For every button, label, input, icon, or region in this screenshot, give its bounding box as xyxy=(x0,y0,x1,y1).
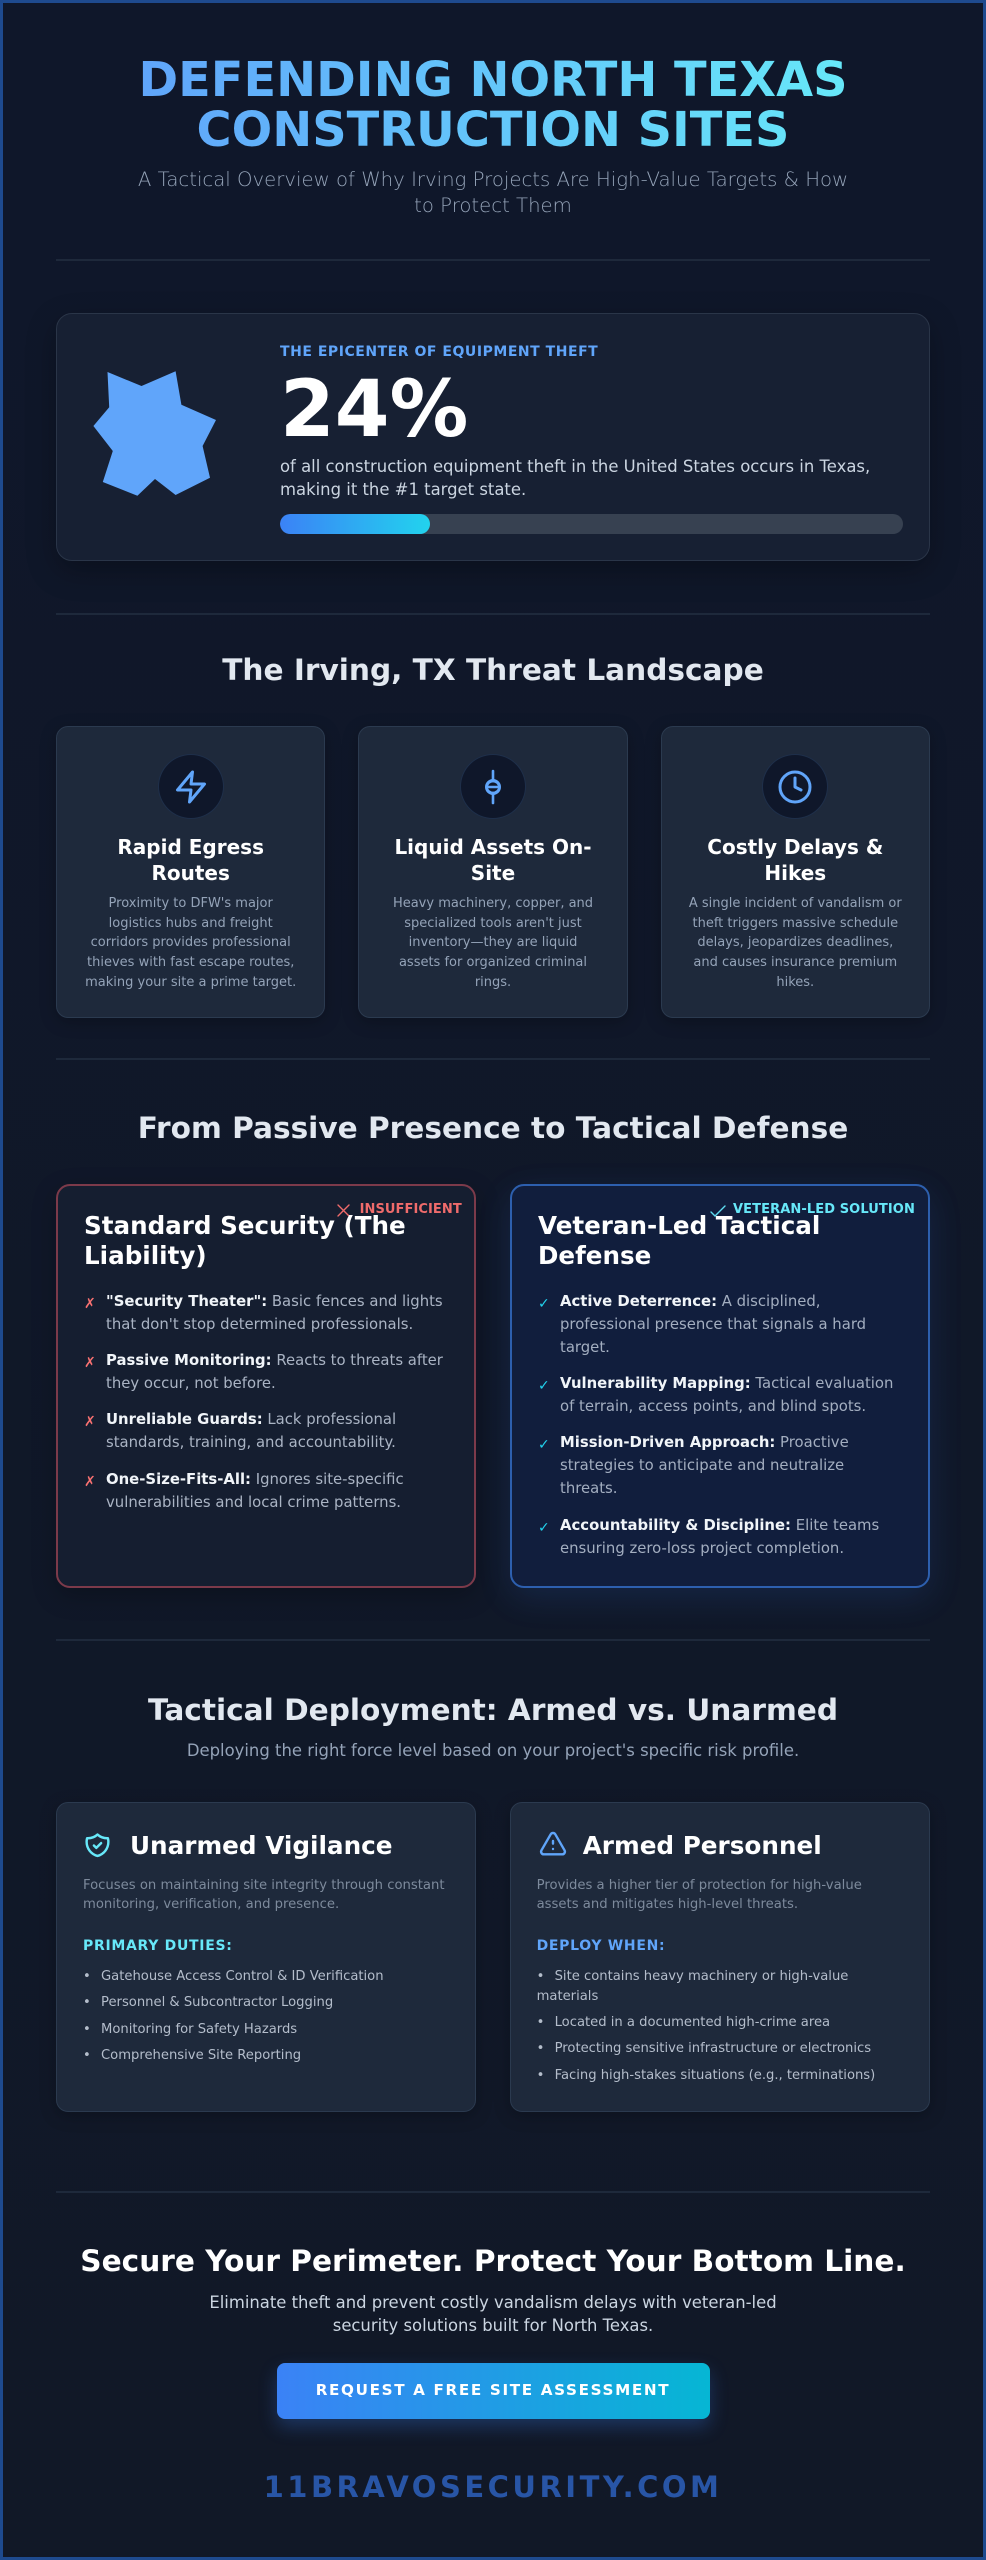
card title xyxy=(707,835,883,885)
panel title: Defense xyxy=(538,1240,651,1270)
duties list: • xyxy=(83,1995,91,2010)
card: costly delays xyxy=(661,726,930,1018)
button: REQUEST A FREE SITE ASSESSMENT xyxy=(316,2381,670,2399)
list item: vulnerabilities and local crime patterns. xyxy=(106,1493,401,1511)
badge: veteran-led solution xyxy=(710,1202,915,1217)
card title: Routes xyxy=(151,861,230,885)
list item: Active Deterrence: A disciplined, xyxy=(560,1292,821,1310)
cross mark: ✗ xyxy=(84,1355,96,1371)
duties list xyxy=(83,1969,384,2063)
heading: threat landscape: The Irving, TX Threat Landscape xyxy=(222,653,764,687)
card title: Rapid Egress xyxy=(117,835,264,859)
duties list: • xyxy=(83,2048,91,2063)
panel: standard security xyxy=(56,1184,476,1588)
card text: rings. xyxy=(475,975,511,990)
duties list: Gatehouse Access Control & ID Verification xyxy=(101,1969,384,1984)
cta text: Eliminate theft and prevent costly vandalism delays with veteran-led xyxy=(209,2293,777,2312)
deploy list: materials xyxy=(537,1989,598,2004)
subtitle: A Tactical Overview of Why Irving Projects Are High-Value Targets & How xyxy=(138,168,848,191)
card text xyxy=(393,896,593,990)
stat number: 24% xyxy=(280,363,468,455)
panel text: Focuses on maintaining site integrity through constant xyxy=(83,1878,445,1893)
list item: standards, training, and accountability. xyxy=(106,1433,396,1451)
duties label: PRIMARY DUTIES: xyxy=(83,1938,233,1954)
card: liquid assets xyxy=(358,726,628,1018)
panel text: monitoring, verification, and presence. xyxy=(83,1897,339,1912)
card title: Site xyxy=(471,861,515,885)
check mark: ✓ xyxy=(538,1378,550,1394)
heading: tactical deployment: Tactical Deployment: Armed vs. Unarmed xyxy=(148,1693,838,1727)
progress fill 24% xyxy=(280,514,430,534)
header xyxy=(138,53,848,217)
list item: strategies to anticipate and neutralize xyxy=(560,1456,844,1474)
list item: Mission-Driven Approach: Proactive xyxy=(560,1433,849,1451)
card title xyxy=(117,835,264,885)
cta text xyxy=(209,2293,777,2335)
list item: One-Size-Fits-All: Ignores site-specific xyxy=(106,1470,404,1488)
card title: Liquid Assets On- xyxy=(394,835,592,859)
cta heading: Secure Your Perimeter. Protect Your Bottom Line. xyxy=(80,2244,906,2278)
panel: veteran-led xyxy=(510,1184,930,1588)
badge text: INSUFFICIENT xyxy=(360,1202,462,1217)
list item xyxy=(538,1516,879,1557)
deploy label: DEPLOY WHEN: xyxy=(537,1938,665,1954)
stat label: THE EPICENTER OF EQUIPMENT THEFT xyxy=(280,344,598,360)
duties list: Comprehensive Site Reporting xyxy=(101,2048,301,2063)
button xyxy=(276,2363,710,2419)
check mark: ✓ xyxy=(538,1437,550,1453)
list item: Accountability & Discipline: Elite teams xyxy=(560,1516,879,1534)
panel: armed personnel xyxy=(510,1802,930,2112)
card text xyxy=(85,896,296,990)
cross mark: ✗ xyxy=(84,1474,96,1490)
list item xyxy=(538,1374,893,1415)
list item: threats. xyxy=(560,1479,618,1497)
panel text xyxy=(537,1878,862,1912)
card text: corridors provides professional xyxy=(91,935,291,950)
card title xyxy=(394,835,592,885)
icon: Texas shape xyxy=(94,371,216,496)
card text: delays, jeopardizes deadlines, xyxy=(697,935,893,950)
progress bar xyxy=(280,514,903,534)
icon: cross xyxy=(337,1204,350,1217)
call to action xyxy=(80,2244,906,2504)
duties list: • xyxy=(83,2022,91,2037)
deploy list: • xyxy=(537,2041,544,2056)
stat description: making it the #1 target state. xyxy=(280,480,526,498)
card text xyxy=(689,896,902,990)
title: CONSTRUCTION SITES xyxy=(196,102,789,158)
panel: 24% statistic xyxy=(56,313,930,561)
list item: Passive Monitoring: Reacts to threats after xyxy=(106,1351,443,1369)
cta text: security solutions built for North Texas. xyxy=(333,2316,653,2335)
list item: Vulnerability Mapping: Tactical evaluation xyxy=(560,1374,893,1392)
card text: A single incident of vandalism or xyxy=(689,896,902,911)
list item: that don't stop determined professionals. xyxy=(106,1315,413,1333)
website: 11BRAVOSECURITY.COM xyxy=(264,2470,722,2504)
deploy list: Protecting sensitive infrastructure or electronics xyxy=(555,2041,871,2056)
card text: assets for organized criminal xyxy=(399,955,587,970)
badge text: VETERAN-LED SOLUTION xyxy=(733,1202,915,1217)
list item: "Security Theater": Basic fences and lights xyxy=(106,1292,443,1310)
card text: thieves with fast escape routes, xyxy=(87,955,294,970)
list item xyxy=(84,1470,404,1511)
duties list: Personnel & Subcontractor Logging xyxy=(101,1995,333,2010)
card text: theft triggers massive schedule xyxy=(692,916,898,931)
panel text: Provides a higher tier of protection for high-value xyxy=(537,1878,862,1893)
list item xyxy=(538,1292,866,1356)
card text: Proximity to DFW's major xyxy=(109,896,273,911)
card text: and causes insurance premium xyxy=(693,955,897,970)
subtitle: to Protect Them xyxy=(414,194,572,217)
icon: lightning xyxy=(158,754,224,819)
icon: shield xyxy=(85,1833,110,1858)
icon: warning xyxy=(540,1832,566,1856)
check mark: ✓ xyxy=(538,1296,550,1312)
duties list: Monitoring for Safety Hazards xyxy=(101,2022,297,2037)
deploy list xyxy=(537,1969,875,2083)
list item: they occur, not before. xyxy=(106,1374,276,1392)
list item: ensuring zero-loss project completion. xyxy=(560,1539,844,1557)
list item xyxy=(84,1351,443,1392)
card title: Hikes xyxy=(764,861,826,885)
panel text xyxy=(83,1878,445,1912)
title: DEFENDING NORTH TEXAS xyxy=(138,53,848,108)
panel title xyxy=(84,1210,406,1270)
panel title: Standard Security (The xyxy=(84,1210,406,1240)
subheading: Deploying the right force level based on your project's specific risk profile. xyxy=(187,1741,799,1760)
panel title: Unarmed Vigilance xyxy=(130,1830,393,1860)
panel text: assets and mitigates high-level threats. xyxy=(537,1897,798,1912)
panel: unarmed vigilance xyxy=(56,1802,476,2112)
panel title: Veteran-Led Tactical xyxy=(538,1210,820,1240)
card text: specialized tools aren't just xyxy=(404,916,582,931)
deploy list: Located in a documented high-crime area xyxy=(555,2015,830,2030)
title xyxy=(136,56,850,155)
list item: target. xyxy=(560,1338,610,1356)
card text: Heavy machinery, copper, and xyxy=(393,896,593,911)
deploy list: • xyxy=(537,2068,544,2083)
cross mark: ✗ xyxy=(84,1414,96,1430)
panel title: Liability) xyxy=(84,1240,207,1270)
panel title xyxy=(538,1210,820,1270)
check mark: ✓ xyxy=(538,1520,550,1536)
stat description xyxy=(280,456,870,498)
deploy list: • xyxy=(537,1969,544,1984)
deploy list: Site contains heavy machinery or high-value xyxy=(555,1969,848,1984)
icon: dollar xyxy=(460,754,526,819)
card title: Costly Delays & xyxy=(707,835,883,859)
cross mark: ✗ xyxy=(84,1296,96,1312)
card text: hikes. xyxy=(776,975,814,990)
deploy list: • xyxy=(537,2015,544,2030)
list item: Unreliable Guards: Lack professional xyxy=(106,1410,396,1428)
stat description: of all construction equipment theft in the United States occurs in Texas, xyxy=(280,456,870,476)
icon: check xyxy=(710,1205,726,1217)
list item xyxy=(538,1433,849,1497)
list item: professional presence that signals a hard xyxy=(560,1315,866,1333)
card text: inventory—they are liquid xyxy=(409,935,577,950)
list item xyxy=(84,1292,443,1333)
badge: insufficient xyxy=(337,1202,462,1217)
icon: clock xyxy=(762,754,828,819)
list item xyxy=(84,1410,396,1451)
list item: of terrain, access points, and blind spots. xyxy=(560,1397,866,1415)
heading: passive to tactical: From Passive Presence to Tactical Defense xyxy=(138,1111,848,1145)
duties list: • xyxy=(83,1969,91,1984)
subtitle xyxy=(138,168,848,217)
card text: making your site a prime target. xyxy=(85,975,296,990)
deploy list: Facing high-stakes situations (e.g., terminations) xyxy=(555,2068,875,2083)
panel title: Armed Personnel xyxy=(583,1830,822,1860)
card text: logistics hubs and freight xyxy=(109,916,273,931)
card: rapid egress routes xyxy=(56,726,325,1018)
